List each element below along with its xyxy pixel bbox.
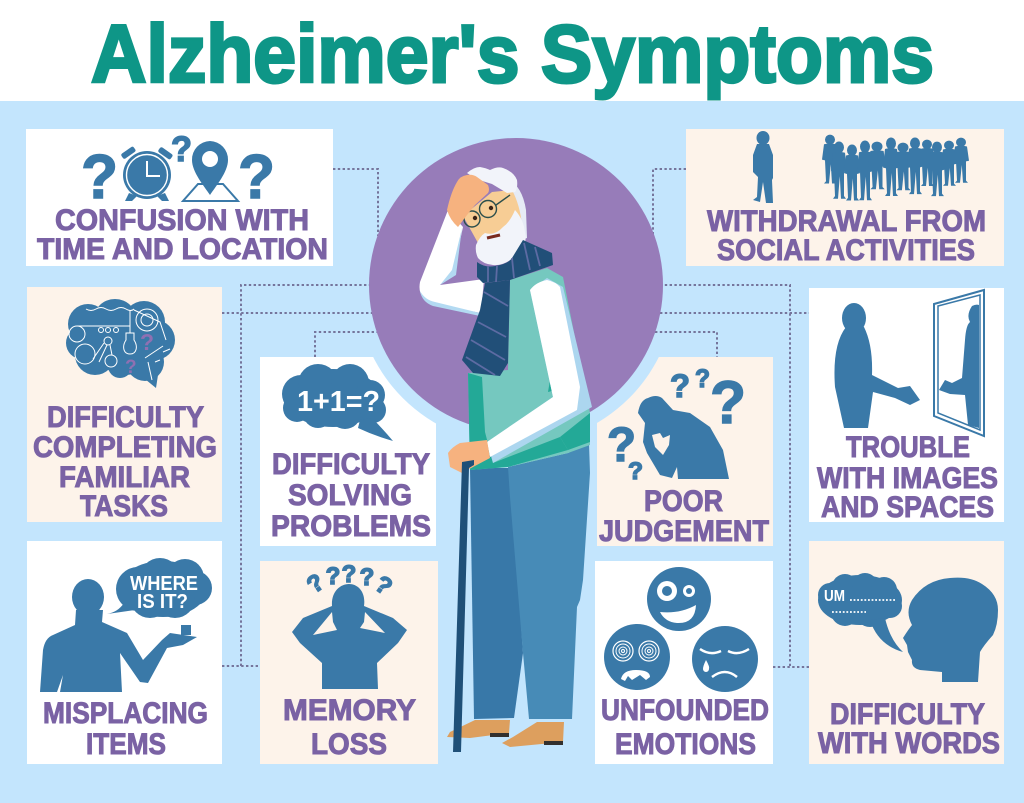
panel: poor judgement	[597, 357, 773, 548]
label: TASKS	[80, 490, 168, 523]
label: WITH WORDS	[818, 727, 1000, 760]
panel: withdrawal from social activities	[686, 129, 1004, 267]
icon: hunched man with question marks: ?	[670, 368, 690, 404]
icon: map pin	[183, 141, 238, 201]
icon: alarm clock	[121, 146, 173, 201]
label: DIFFICULTY	[272, 448, 430, 481]
icon: brain with machinery	[66, 299, 175, 388]
panel: misplacing items	[27, 541, 222, 764]
panel: trouble with images and spaces	[809, 288, 1004, 524]
icon: cloud with sum: 1+1=?	[297, 386, 380, 418]
label: MEMORY	[283, 694, 416, 727]
icon: head with speech bubble	[818, 573, 998, 682]
panel: difficulty with words	[809, 541, 1004, 764]
label: CONFUSION WITH	[55, 204, 309, 237]
label	[817, 431, 998, 524]
label: ITEMS	[86, 728, 166, 761]
label: TIME AND LOCATION	[37, 233, 328, 266]
cane	[453, 460, 474, 752]
label: COMPLETING	[33, 431, 217, 464]
label: SOCIAL ACTIVITIES	[717, 234, 975, 267]
label: PROBLEMS	[271, 510, 431, 543]
scarf	[462, 240, 553, 376]
label: UNFOUNDED	[601, 694, 769, 727]
label	[271, 448, 431, 543]
label	[283, 694, 416, 761]
label: DIFFICULTY	[830, 698, 985, 731]
icon: man holding head: ?	[302, 569, 329, 599]
panel: confusion with time and location	[26, 129, 333, 266]
trousers	[470, 443, 590, 719]
connector lines	[222, 169, 809, 667]
icon: crowd	[822, 135, 969, 200]
vest	[468, 268, 590, 470]
label: SOLVING	[288, 479, 412, 512]
circle halo	[356, 125, 676, 445]
panel: memory loss	[260, 561, 438, 764]
label: AND SPACES	[821, 491, 994, 524]
shoes	[447, 720, 564, 747]
icon: man holding head: ?	[342, 561, 356, 588]
icon: question mark right: ?	[238, 143, 275, 212]
icon: man with cup and speech bubble: IS IT?	[137, 591, 188, 613]
label: POOR	[644, 485, 723, 518]
icon: man with cup and speech bubble: WHERE	[130, 573, 198, 595]
head and face	[463, 167, 527, 265]
icon: brain with machinery: ?	[140, 329, 154, 355]
label	[707, 205, 986, 267]
icon: small question mark: ?	[171, 130, 192, 169]
panel: unfounded emotions	[595, 561, 773, 764]
icon: happy face	[647, 567, 711, 631]
icon: man reaching to mirror	[834, 290, 984, 436]
icon: hunched man with question marks: ?	[710, 369, 746, 436]
label: WITHDRAWAL FROM	[707, 205, 986, 238]
label: FAMILIAR	[59, 461, 190, 494]
hand on forehead	[447, 175, 489, 227]
raised arm	[420, 210, 484, 313]
icon: dizzy face	[604, 624, 670, 690]
panel: difficulty completing familiar tasks	[27, 287, 222, 523]
label: LOSS	[311, 728, 387, 761]
icon: man holding head: ?	[370, 571, 397, 601]
icon: man with cup and speech bubble	[40, 558, 212, 692]
panel: difficulty solving problems	[260, 357, 436, 546]
label: WITH IMAGES	[817, 462, 998, 495]
label	[37, 204, 328, 266]
icon: lone man	[753, 131, 773, 203]
icon: hunched man with question marks: ?	[607, 419, 636, 472]
icon: man holding head	[292, 561, 407, 689]
icon: cloud with sum	[282, 364, 393, 441]
purple circle	[369, 138, 663, 432]
label	[43, 697, 208, 761]
icon: hunched man with question marks	[607, 365, 746, 485]
icon: question mark left: ?	[81, 143, 118, 212]
figure: old man with cane	[420, 167, 592, 752]
hand on cane	[448, 440, 490, 473]
label: TROUBLE	[846, 431, 970, 464]
label	[818, 698, 1000, 760]
label	[601, 694, 769, 761]
title: Alzheimer's Symptoms	[91, 9, 934, 100]
icon: brain with machinery: ?	[125, 357, 137, 378]
label	[33, 401, 217, 523]
icon: hunched man with question marks: ?	[695, 365, 710, 393]
label: MISPLACING	[43, 697, 208, 730]
label	[599, 485, 769, 548]
label: EMOTIONS	[615, 728, 756, 761]
icon: hunched man with question marks: ?	[628, 458, 643, 485]
icon: man holding head: ?	[326, 563, 340, 590]
icon: crying face	[692, 626, 758, 692]
label: JUDGEMENT	[599, 515, 769, 548]
right arm	[487, 278, 592, 463]
label: DIFFICULTY	[47, 401, 204, 434]
icon: man holding head: ?	[360, 564, 374, 591]
icon: head with speech bubble: UM	[824, 588, 845, 605]
